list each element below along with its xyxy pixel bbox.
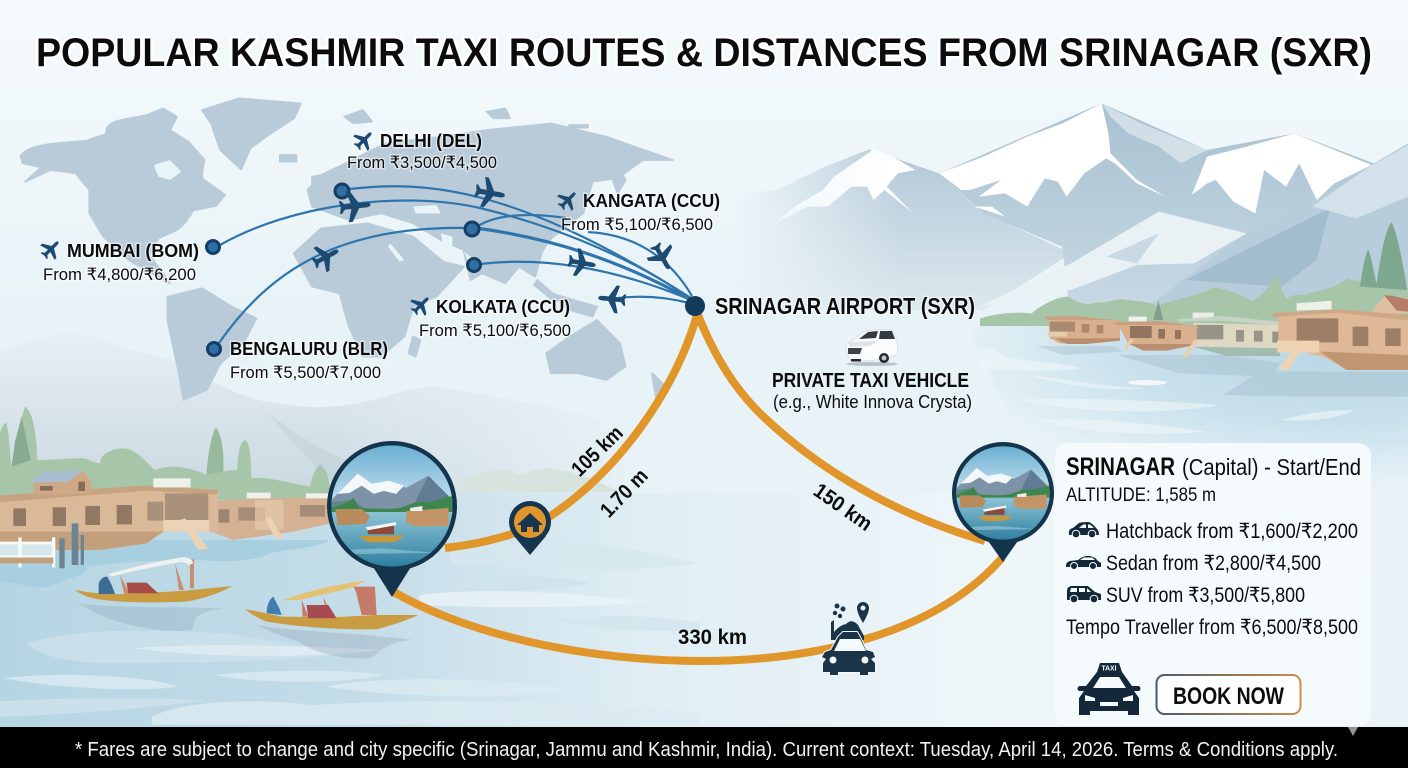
front ridge — [979, 212, 1247, 307]
label: Delhi: DELHI (DEL) — [380, 131, 482, 151]
label: Delhi: From ₹3,500/₹4,500 — [347, 153, 497, 172]
hazy hills, left — [0, 362, 564, 493]
footer bar — [0, 727, 1408, 768]
rear houseboats — [197, 497, 330, 540]
right ridge — [1152, 144, 1408, 306]
greenland — [202, 98, 301, 169]
route: west pin to east pin — [394, 558, 1002, 661]
water highlights — [980, 347, 1355, 434]
label: Mumbai: MUMBAI (BOM) — [67, 241, 199, 261]
snow caps — [777, 103, 1372, 222]
pale tree line behind the lake — [455, 468, 620, 492]
eurasia — [308, 123, 673, 283]
route: Mumbai — [220, 200, 691, 300]
world map — [21, 98, 673, 400]
label: Kolkata: From ₹5,100/₹6,500 — [419, 321, 571, 340]
pin: Srinagar destination — [952, 442, 1054, 562]
icon: taxi with map marker — [822, 602, 875, 675]
button: book now — [1156, 675, 1300, 714]
label: Kangata: KANGATA (CCU) — [583, 191, 720, 211]
label: Srinagar Airport: SRINAGAR AIRPORT (SXR) — [715, 293, 975, 319]
route: Kangata — [478, 215, 692, 296]
mountains, right — [768, 104, 1408, 310]
panel: Srinagar fares — [1055, 443, 1371, 726]
inland seas — [154, 160, 473, 262]
label: Mumbai — [37, 235, 199, 284]
panel heading: SRINAGAR — [1066, 453, 1175, 481]
orange taxi routes — [394, 315, 1002, 661]
houseboats, right — [980, 295, 1408, 434]
label: Bengaluru: BENGALURU (BLR) — [230, 339, 388, 359]
far mountain — [768, 149, 1064, 310]
button: book now: BOOK NOW — [1173, 683, 1284, 710]
boat reflections — [78, 603, 223, 631]
label: Mumbai: From ₹4,800/₹6,200 — [43, 265, 196, 284]
flight routes — [219, 186, 692, 343]
hub dot: Srinagar Airport — [685, 296, 705, 316]
label: private taxi vehicle: PRIVATE TAXI VEHICLE — [772, 370, 969, 392]
lake ripples, left and centre — [0, 540, 700, 725]
boat 2 — [1115, 317, 1198, 357]
label: Delhi — [347, 126, 497, 172]
label: 330 km: 330 km — [678, 626, 747, 649]
trees — [0, 407, 330, 500]
panel heading — [1066, 453, 1361, 481]
route: eastern spur — [618, 297, 689, 303]
route: airport to west pin — [445, 315, 697, 548]
icon: hatchback — [1069, 522, 1099, 538]
icon: sedan — [1066, 556, 1101, 570]
route: Delhi — [342, 186, 691, 298]
label: 105 km: 105 km — [567, 422, 628, 481]
label: Bengaluru — [230, 339, 388, 382]
dock railing — [0, 543, 55, 557]
left lakeside scene — [0, 407, 418, 658]
label: Kolkata — [407, 291, 571, 340]
panel heading: (Capital) - Start/End — [1182, 454, 1361, 480]
route: airport to east pin — [698, 315, 985, 541]
route planes — [307, 176, 681, 314]
pin: house marker — [509, 501, 551, 555]
label: private taxi vehicle — [772, 370, 972, 412]
lake water, right — [970, 326, 1408, 500]
icon: SUV — [1067, 586, 1101, 603]
pin: west lake destination — [327, 441, 457, 597]
reflections — [1037, 346, 1408, 397]
fare: tempo traveller: Tempo Traveller from ₹6,500/₹8,500 — [1066, 616, 1358, 639]
fare: hatchback: Hatchback from ₹1,600/₹2,200 — [1106, 520, 1358, 543]
label: 150 km: 150 km — [809, 479, 876, 536]
fare: sedan: Sedan from ₹2,800/₹4,500 — [1106, 552, 1321, 575]
route: hub to central dot — [476, 228, 691, 300]
boat: shikara rear — [75, 557, 233, 602]
label: Bengaluru: From ₹5,500/₹7,000 — [230, 363, 381, 382]
islands — [280, 108, 666, 400]
lake water, left and centre — [0, 493, 1060, 727]
route endpoint dots — [206, 184, 480, 356]
label: Kangata: From ₹5,100/₹6,500 — [561, 215, 713, 234]
boat 1 — [1043, 316, 1120, 344]
route: Kolkata — [480, 262, 691, 300]
icon: taxi — [1078, 663, 1140, 715]
south america — [168, 288, 256, 400]
fare: SUV: SUV from ₹3,500/₹5,800 — [1106, 584, 1305, 607]
altitude: ALTITUDE: 1,585 m — [1066, 485, 1216, 506]
north america — [21, 108, 225, 283]
main range — [939, 103, 1408, 323]
footer note: * Fares are subject to change and city specific (Srinagar, Jammu and Kashmir, India). Current context: Tuesday, April 14, 2026. Terms & Conditions apply. — [75, 739, 1338, 761]
icon: taxi: TAXI — [1102, 666, 1117, 672]
main houseboat — [0, 486, 218, 550]
icon: private taxi vehicle — [846, 330, 898, 366]
shoreline water — [0, 540, 328, 588]
label: Kangata — [554, 186, 720, 234]
tree line, right — [980, 222, 1408, 337]
boat 4 — [1271, 295, 1408, 371]
route: Bengaluru — [219, 228, 470, 343]
label: private taxi vehicle: (e.g., White Innova Crysta) — [773, 392, 972, 412]
africa — [294, 223, 464, 357]
boat 3 — [1177, 313, 1280, 356]
australia — [546, 320, 625, 380]
label: 1.70 m: 1.70 m — [596, 464, 653, 522]
boat: shikara front — [245, 581, 418, 629]
label: Kolkata: KOLKATA (CCU) — [436, 297, 570, 317]
